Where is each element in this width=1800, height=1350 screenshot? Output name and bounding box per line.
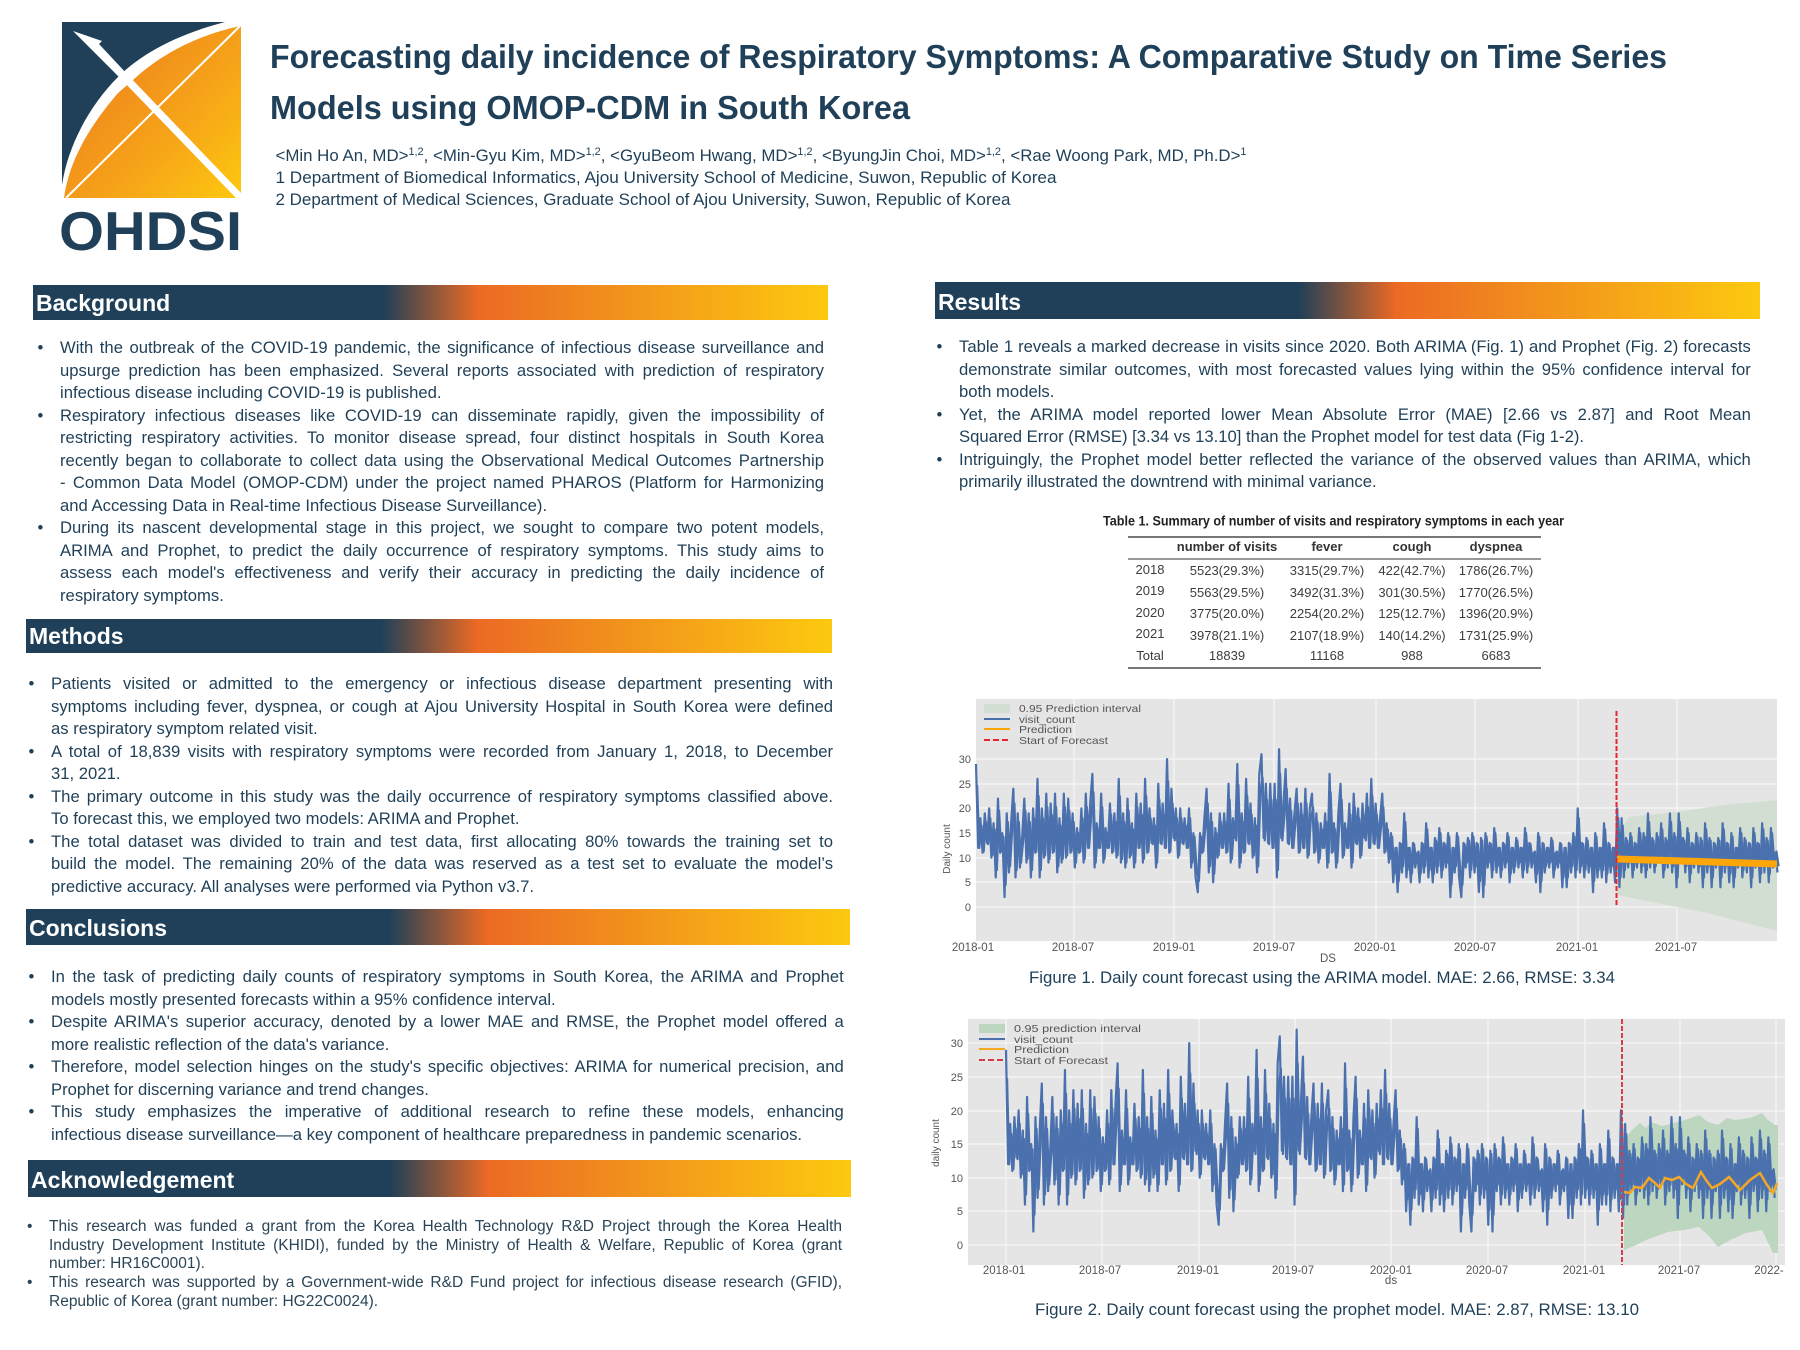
text: • — [28, 786, 34, 806]
text block: conclusions bullets: In the task of predicting daily counts of respiratory symptoms in South Korea, the ARIMA and Prophet — [51, 967, 844, 986]
authors and affiliations: 2 Department of Medical Sciences, Graduate School of Ajou University, Suwon, Republic of Korea — [276, 190, 1011, 209]
text block: results bullets: Squared Error (RMSE) [3.34 vs 13.10] than the Prophet model for test data (Fig 1-2). — [959, 427, 1584, 446]
chart axes labels: daily count — [931, 1119, 942, 1167]
table 1: visits and symptoms by year: 3492(31.3%) — [1290, 585, 1364, 600]
chart axes labels: 0 — [965, 902, 971, 914]
chart: figure 1 ARIMA forecast — [942, 699, 1779, 965]
table 1: visits and symptoms by year: 6683 — [1482, 648, 1510, 663]
chart legend: visit_count — [1019, 714, 1075, 726]
text: • — [27, 1218, 32, 1235]
heading: Acknowledgement: Acknowledgement — [31, 1166, 234, 1192]
text: • — [37, 406, 43, 424]
text block: methods bullets — [28, 674, 833, 896]
table 1: visits and symptoms by year: 1770(26.5%) — [1459, 585, 1533, 600]
table 1: visits and symptoms by year: 422(42.7%) — [1378, 563, 1446, 578]
text block: background bullets: With the outbreak of the COVID-19 pandemic, the significance of infectious disease surveillance and — [60, 338, 824, 357]
text block: methods bullets: Patients visited or admitted to the emergency or infectious disease department presenting with — [50, 674, 833, 693]
table 1: visits and symptoms by year: 988 — [1401, 648, 1423, 663]
table 1: visits and symptoms by year: 2019 — [1136, 583, 1164, 598]
text block: results bullets — [936, 337, 1751, 491]
text block: conclusions bullets: more realistic reflection of the data's variance. — [51, 1034, 389, 1054]
text block: results bullets: Table 1 reveals a marked decrease in visits since 2020. Both ARIMA (Fig. 1) and Prophet (Fig. 2) forecasts — [959, 337, 1751, 356]
chart: figure 2 Prophet forecast — [931, 1019, 1785, 1287]
chart axes labels: 20 — [951, 1106, 963, 1118]
table 1: visits and symptoms by year: dyspnea — [1470, 539, 1523, 554]
table 1: visits and symptoms by year: 301(30.5%) — [1378, 585, 1446, 600]
text block: results bullets: Intriguingly, the Prophet model better reflected the variance of the observed values than ARIMA, which — [959, 450, 1751, 468]
heading: Methods — [26, 619, 832, 653]
chart axes labels: 2020-01 — [1370, 1265, 1412, 1277]
authors and affiliations: , <ByungJin Choi, MD> — [813, 146, 986, 165]
chart axes labels: 2020-07 — [1454, 942, 1496, 954]
text block: conclusions bullets — [28, 967, 844, 1144]
icon: OHDSI logo: OHDSI — [59, 200, 242, 262]
text block: methods bullets: The primary outcome in this study was the daily occurrence of respiratory symptoms classified above. — [50, 786, 833, 806]
authors and affiliations: , <Rae Woong Park, MD, Ph.D> — [1001, 146, 1240, 165]
chart axes labels: 2018-07 — [1052, 942, 1094, 954]
chart legend: visit_count — [1014, 1034, 1073, 1046]
authors and affiliations: 1,2 — [986, 146, 1001, 158]
table 1: visits and symptoms by year: number of visits — [1177, 539, 1277, 554]
text block: acknowledgement bullets: number: HR16C0001). — [49, 1255, 205, 1272]
chart axes labels: 5 — [965, 877, 971, 889]
chart axes labels: 2021-01 — [1556, 942, 1598, 954]
text: • — [37, 338, 43, 357]
text block: background bullets: Respiratory infectious diseases like COVID-19 can disseminate rapidly, given the impossibility of — [60, 406, 824, 424]
text block: methods bullets: build the model. The remaining 20% of the data was reserved as a test set to evaluate the model’s — [50, 854, 833, 873]
chart axes labels: 5 — [957, 1206, 963, 1218]
chart axes labels: 30 — [959, 754, 971, 766]
text block: results bullets: both models. — [959, 382, 1054, 401]
text: • — [936, 337, 942, 356]
chart axes labels: 10 — [959, 853, 971, 865]
chart axes labels: 2019-07 — [1272, 1265, 1314, 1277]
text block: conclusions bullets: Therefore, model selection hinges on the study's specific objectives: ARIMA for numerical precision, and — [51, 1057, 844, 1076]
text: • — [28, 674, 34, 693]
chart axes labels: 2022- — [1754, 1265, 1784, 1277]
text block: background bullets: and Accessing Data in Real-time Infectious Disease Surveillance). — [60, 496, 547, 514]
text block: background bullets: infectious disease including COVID-19 is published. — [60, 383, 442, 402]
text block: methods bullets: symptoms including fever, dyspnea, or cough at Ajou University Hospital in South Korea were defined — [50, 696, 833, 716]
table 1: visits and symptoms by year: 2018 — [1136, 562, 1164, 577]
caption: figure 1: Figure 1. Daily count forecast using the ARIMA model. MAE: 2.66, RMSE: 3.34 — [1029, 968, 1615, 987]
authors and affiliations: <Min Ho An, MD> — [276, 146, 410, 165]
chart axes labels: 2018-07 — [1079, 1265, 1121, 1277]
table 1: visits and symptoms by year: 1396(20.9%) — [1459, 606, 1533, 621]
text: • — [27, 1274, 32, 1291]
text block: background bullets: During its nascent developmental stage in this project, we sought to compare two potent models, — [60, 518, 824, 537]
chart axes labels: Daily count — [942, 824, 953, 874]
title — [270, 38, 1667, 126]
chart axes labels: 2019-07 — [1253, 942, 1295, 954]
heading: Conclusions: Conclusions — [29, 915, 167, 941]
chart legend: 0.95 Prediction interval — [1019, 703, 1141, 715]
chart axes labels: 10 — [951, 1173, 963, 1185]
text block: acknowledgement bullets — [27, 1218, 842, 1310]
icon: OHDSI logo — [59, 22, 242, 262]
chart axes labels: 2019-01 — [1177, 1265, 1219, 1277]
text block: background bullets: restricting respiratory activities. To monitor disease spread, four distinct hospitals in South Korea — [60, 428, 824, 447]
table 1: visits and symptoms by year: 1731(25.9%) — [1459, 628, 1533, 643]
text block: acknowledgement bullets: Republic of Korea (grant number: HG22C0024). — [49, 1293, 378, 1310]
chart axes labels: 15 — [959, 828, 971, 840]
heading: Background — [33, 285, 828, 320]
table 1: visits and symptoms by year: cough — [1392, 539, 1432, 554]
chart legend: Prediction — [1019, 724, 1072, 736]
text block: background bullets: - Common Data Model (OMOP-CDM) under the project named PHAROS (Platform for Harmonizing — [60, 473, 824, 492]
table 1: visits and symptoms by year: Table 1. Summary of number of visits and respiratory symptoms in each year — [1103, 514, 1565, 528]
text block: methods bullets: predictive accuracy. All analyses were performed via Python v3.7. — [50, 876, 534, 896]
heading: Conclusions — [26, 909, 850, 945]
text block: conclusions bullets: Despite ARIMA's superior accuracy, denoted by a lower MAE and RMSE, the Prophet model offered a — [51, 1012, 844, 1031]
text: • — [28, 832, 34, 850]
text block: results bullets: demonstrate similar outcomes, with most forecasted values lying within the 95% confidence interval for — [959, 360, 1751, 378]
authors and affiliations — [276, 146, 1246, 209]
text block: background bullets: upsurge prediction has been emphasized. Several reports associated with prediction of respiratory — [60, 360, 824, 380]
authors and affiliations: 1,2 — [586, 146, 601, 158]
chart axes labels — [931, 1038, 1784, 1287]
text block: methods bullets: To forecast this, we employed two models: ARIMA and Prophet. — [50, 809, 519, 828]
table 1: visits and symptoms by year: 1786(26.7%) — [1459, 563, 1533, 578]
authors and affiliations: , <Min-Gyu Kim, MD> — [424, 146, 586, 165]
table 1: visits and symptoms by year: 2254(20.2%) — [1290, 606, 1364, 621]
text block: acknowledgement bullets: Industry Development Institute (KHIDI), funded by the Ministry of Health & Welfare, Republic of Korea (grant — [49, 1237, 842, 1254]
chart axes labels: ds — [1385, 1275, 1397, 1287]
chart axes labels: 2021-07 — [1655, 942, 1697, 954]
table 1: visits and symptoms by year: 18839 — [1209, 648, 1245, 663]
text block: results bullets: Yet, the ARIMA model reported lower Mean Absolute Error (MAE) [2.66 vs 2.87] and Root Mean — [959, 404, 1751, 424]
table 1: visits and symptoms by year: 3978(21.1%) — [1190, 628, 1264, 643]
text: • — [28, 1057, 34, 1076]
text block: background bullets: ARIMA and Prophet, to predict the daily occurrence of respiratory symptoms. This study aims to — [60, 540, 824, 560]
text: • — [28, 1102, 34, 1121]
chart axes labels — [942, 754, 1697, 965]
table 1: visits and symptoms by year: 2021 — [1136, 626, 1164, 641]
header: logo, title and authors — [59, 22, 1667, 262]
text block: acknowledgement bullets: This research was supported by a Government-wide R&D Fund project for infectious disease research (GFID), — [49, 1274, 842, 1291]
table 1: visits and symptoms by year: 2020 — [1136, 605, 1164, 620]
chart legend — [984, 703, 1141, 747]
table 1: visits and symptoms by year — [1103, 514, 1565, 668]
table 1: visits and symptoms by year: fever — [1311, 539, 1343, 554]
text block: background bullets — [37, 338, 824, 604]
chart legend: Start of Forecast — [1019, 735, 1108, 747]
text block: conclusions bullets: This study emphasizes the imperative of additional research to refine these models, enhancing — [51, 1102, 844, 1121]
chart axes labels: 0 — [957, 1240, 963, 1252]
table 1: visits and symptoms by year: 5523(29.3%) — [1190, 563, 1264, 578]
chart axes labels: 20 — [959, 803, 971, 815]
text block: background bullets: recently began to collaborate to collect data using the Observational Medical Outcomes Partnership — [60, 450, 824, 470]
text block: methods bullets: as respiratory symptom related visit. — [50, 719, 317, 738]
authors and affiliations: , <GyuBeom Hwang, MD> — [601, 146, 797, 165]
chart axes labels: 2020-07 — [1466, 1265, 1508, 1277]
chart axes labels: 15 — [951, 1139, 963, 1151]
table 1: visits and symptoms by year: 3315(29.7%) — [1290, 563, 1364, 578]
text: • — [936, 450, 942, 468]
heading: Acknowledgement — [28, 1160, 851, 1197]
table 1: visits and symptoms by year: 125(12.7%) — [1378, 606, 1446, 621]
title: Forecasting daily incidence of Respiratory Symptoms: A Comparative Study on Time Series — [270, 38, 1667, 75]
chart axes labels: 2021-07 — [1658, 1265, 1700, 1277]
text block: results bullets: primarily illustrated the downtrend with minimal variance. — [959, 472, 1377, 491]
text block: conclusions bullets: infectious disease surveillance—a key component of healthcare preparedness in pandemic scenarios. — [51, 1124, 802, 1144]
authors and affiliations: 1,2 — [797, 146, 813, 158]
table 1: visits and symptoms by year: 11168 — [1310, 648, 1344, 663]
text block: methods bullets: The total dataset was divided to train and test data, first allocating 80% towards the training set to — [50, 832, 833, 850]
chart axes labels: 2021-01 — [1563, 1265, 1605, 1277]
caption: figure 2: Figure 2. Daily count forecast using the prophet model. MAE: 2.87, RMSE: 13.10 — [1035, 1300, 1639, 1319]
heading: Methods: Methods — [29, 622, 124, 648]
chart axes labels: 2019-01 — [1153, 942, 1195, 954]
text: • — [28, 1012, 34, 1031]
chart axes labels: 30 — [951, 1038, 963, 1050]
authors and affiliations: 1 Department of Biomedical Informatics, Ajou University School of Medicine, Suwon, Republic of Korea — [276, 168, 1057, 187]
text: • — [28, 967, 34, 986]
text block: background bullets: respiratory symptoms. — [60, 586, 224, 604]
chart axes labels: DS — [1320, 953, 1336, 965]
chart axes labels: 25 — [959, 779, 971, 791]
table 1: visits and symptoms by year: 140(14.2%) — [1378, 628, 1446, 643]
text block: methods bullets: A total of 18,839 visits with respiratory symptoms were recorded from January 1, 2018, to December — [50, 742, 833, 760]
text: • — [28, 742, 34, 760]
text block: conclusions bullets: Prophet for discerning variance and trend changes. — [51, 1080, 429, 1098]
text block: conclusions bullets: models mostly presented forecasts within a 95% confidence interval. — [51, 990, 556, 1008]
table 1: visits and symptoms by year: 5563(29.5%) — [1190, 585, 1264, 600]
chart legend: Start of Forecast — [1014, 1055, 1108, 1067]
chart axes labels: 2018-01 — [983, 1265, 1025, 1277]
heading: Results — [935, 282, 1760, 319]
chart axes labels: 2018-01 — [952, 942, 994, 954]
text: • — [37, 518, 43, 537]
table 1: visits and symptoms by year: 3775(20.0%) — [1190, 606, 1264, 621]
text: • — [936, 404, 942, 424]
chart legend — [979, 1023, 1141, 1067]
text block: acknowledgement bullets: This research was funded a grant from the Korea Health Technology R&D Project through the Korea Health — [49, 1218, 842, 1235]
heading: Results: Results — [938, 288, 1021, 314]
text block: background bullets: assess each model's effectiveness and verify their accuracy in predicting the daily incidence of — [60, 563, 824, 582]
title: Models using OMOP-CDM in South Korea — [270, 89, 911, 126]
chart axes labels: 25 — [951, 1072, 963, 1084]
table 1: visits and symptoms by year: 2107(18.9%) — [1290, 628, 1364, 643]
chart legend: Prediction — [1014, 1044, 1069, 1056]
table 1: visits and symptoms by year: Total — [1136, 648, 1164, 663]
authors and affiliations: 1,2 — [408, 146, 424, 158]
text block: methods bullets: 31, 2021. — [50, 764, 120, 783]
chart axes labels: 2020-01 — [1354, 942, 1396, 954]
chart legend: 0.95 prediction interval — [1014, 1023, 1141, 1035]
authors and affiliations: 1 — [1240, 146, 1246, 158]
heading: Background: Background — [36, 290, 170, 316]
